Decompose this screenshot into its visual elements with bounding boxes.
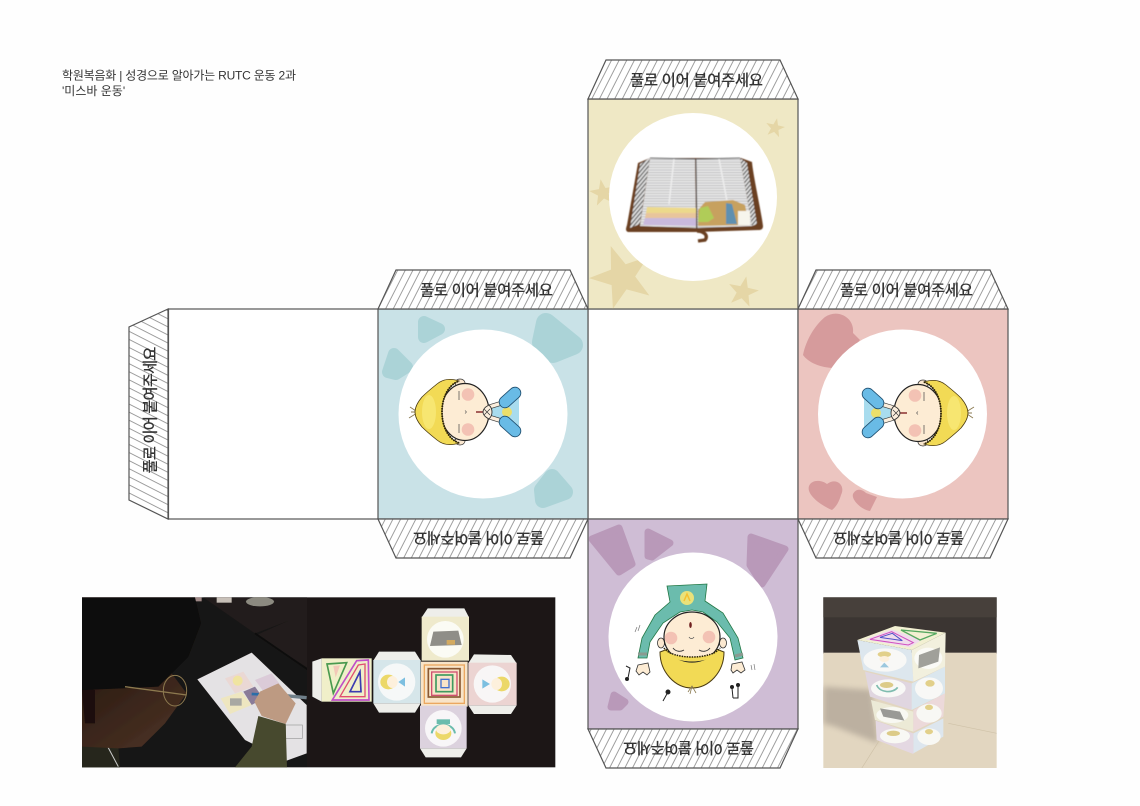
icon: open bible	[626, 158, 763, 241]
title text: '미스바 운동'	[62, 84, 125, 98]
glue tab: far left side: 풀로 이어 붙여주세요	[142, 346, 160, 474]
panel: plain white centre	[588, 309, 798, 519]
glue tab: top of pink face: 풀로 이어 붙여주세요	[840, 282, 973, 300]
cube net	[129, 60, 1008, 768]
glue tab: far left side	[129, 309, 168, 519]
panel: blue face	[378, 309, 588, 519]
panel: yellow bible face	[581, 99, 798, 313]
glue tab: bottom of blue face	[378, 519, 588, 558]
icon: music notes	[626, 625, 755, 701]
glue tab: bottom of purple face	[588, 729, 798, 768]
icon: praying child rotated left	[409, 379, 519, 445]
title text	[62, 68, 296, 98]
icon: praying child rotated right	[864, 380, 974, 446]
glue tab: bottom of blue face: 풀로 이어 붙여주세요	[413, 528, 544, 546]
glue tab: bottom of pink face	[798, 519, 1008, 558]
glue tab: top of blue face: 풀로 이어 붙여주세요	[420, 282, 553, 300]
glue tab: bottom of pink face: 풀로 이어 붙여주세요	[833, 528, 964, 546]
glue tab: top of blue face	[378, 270, 588, 309]
photo: coloured paper net on dark table	[307, 597, 555, 767]
panel: purple face	[588, 519, 798, 729]
photo: child colouring the net	[82, 597, 308, 767]
glue tab: bottom of purple face: 풀로 이어 붙여주세요	[623, 738, 754, 756]
photo: stacked cube boxes on wood floor	[823, 597, 997, 768]
panel: plain white side	[168, 309, 378, 519]
glue tab: top of pink face	[798, 270, 1008, 309]
glue tab: top of yellow face: 풀로 이어 붙여주세요	[630, 72, 763, 90]
title text: 학원복음화 | 성경으로 알아가는 RUTC 운동 2과	[62, 68, 296, 82]
icon: child with raised arms	[626, 584, 755, 701]
glue tab: top of yellow face	[588, 60, 798, 99]
panel: pink face	[798, 309, 1008, 519]
